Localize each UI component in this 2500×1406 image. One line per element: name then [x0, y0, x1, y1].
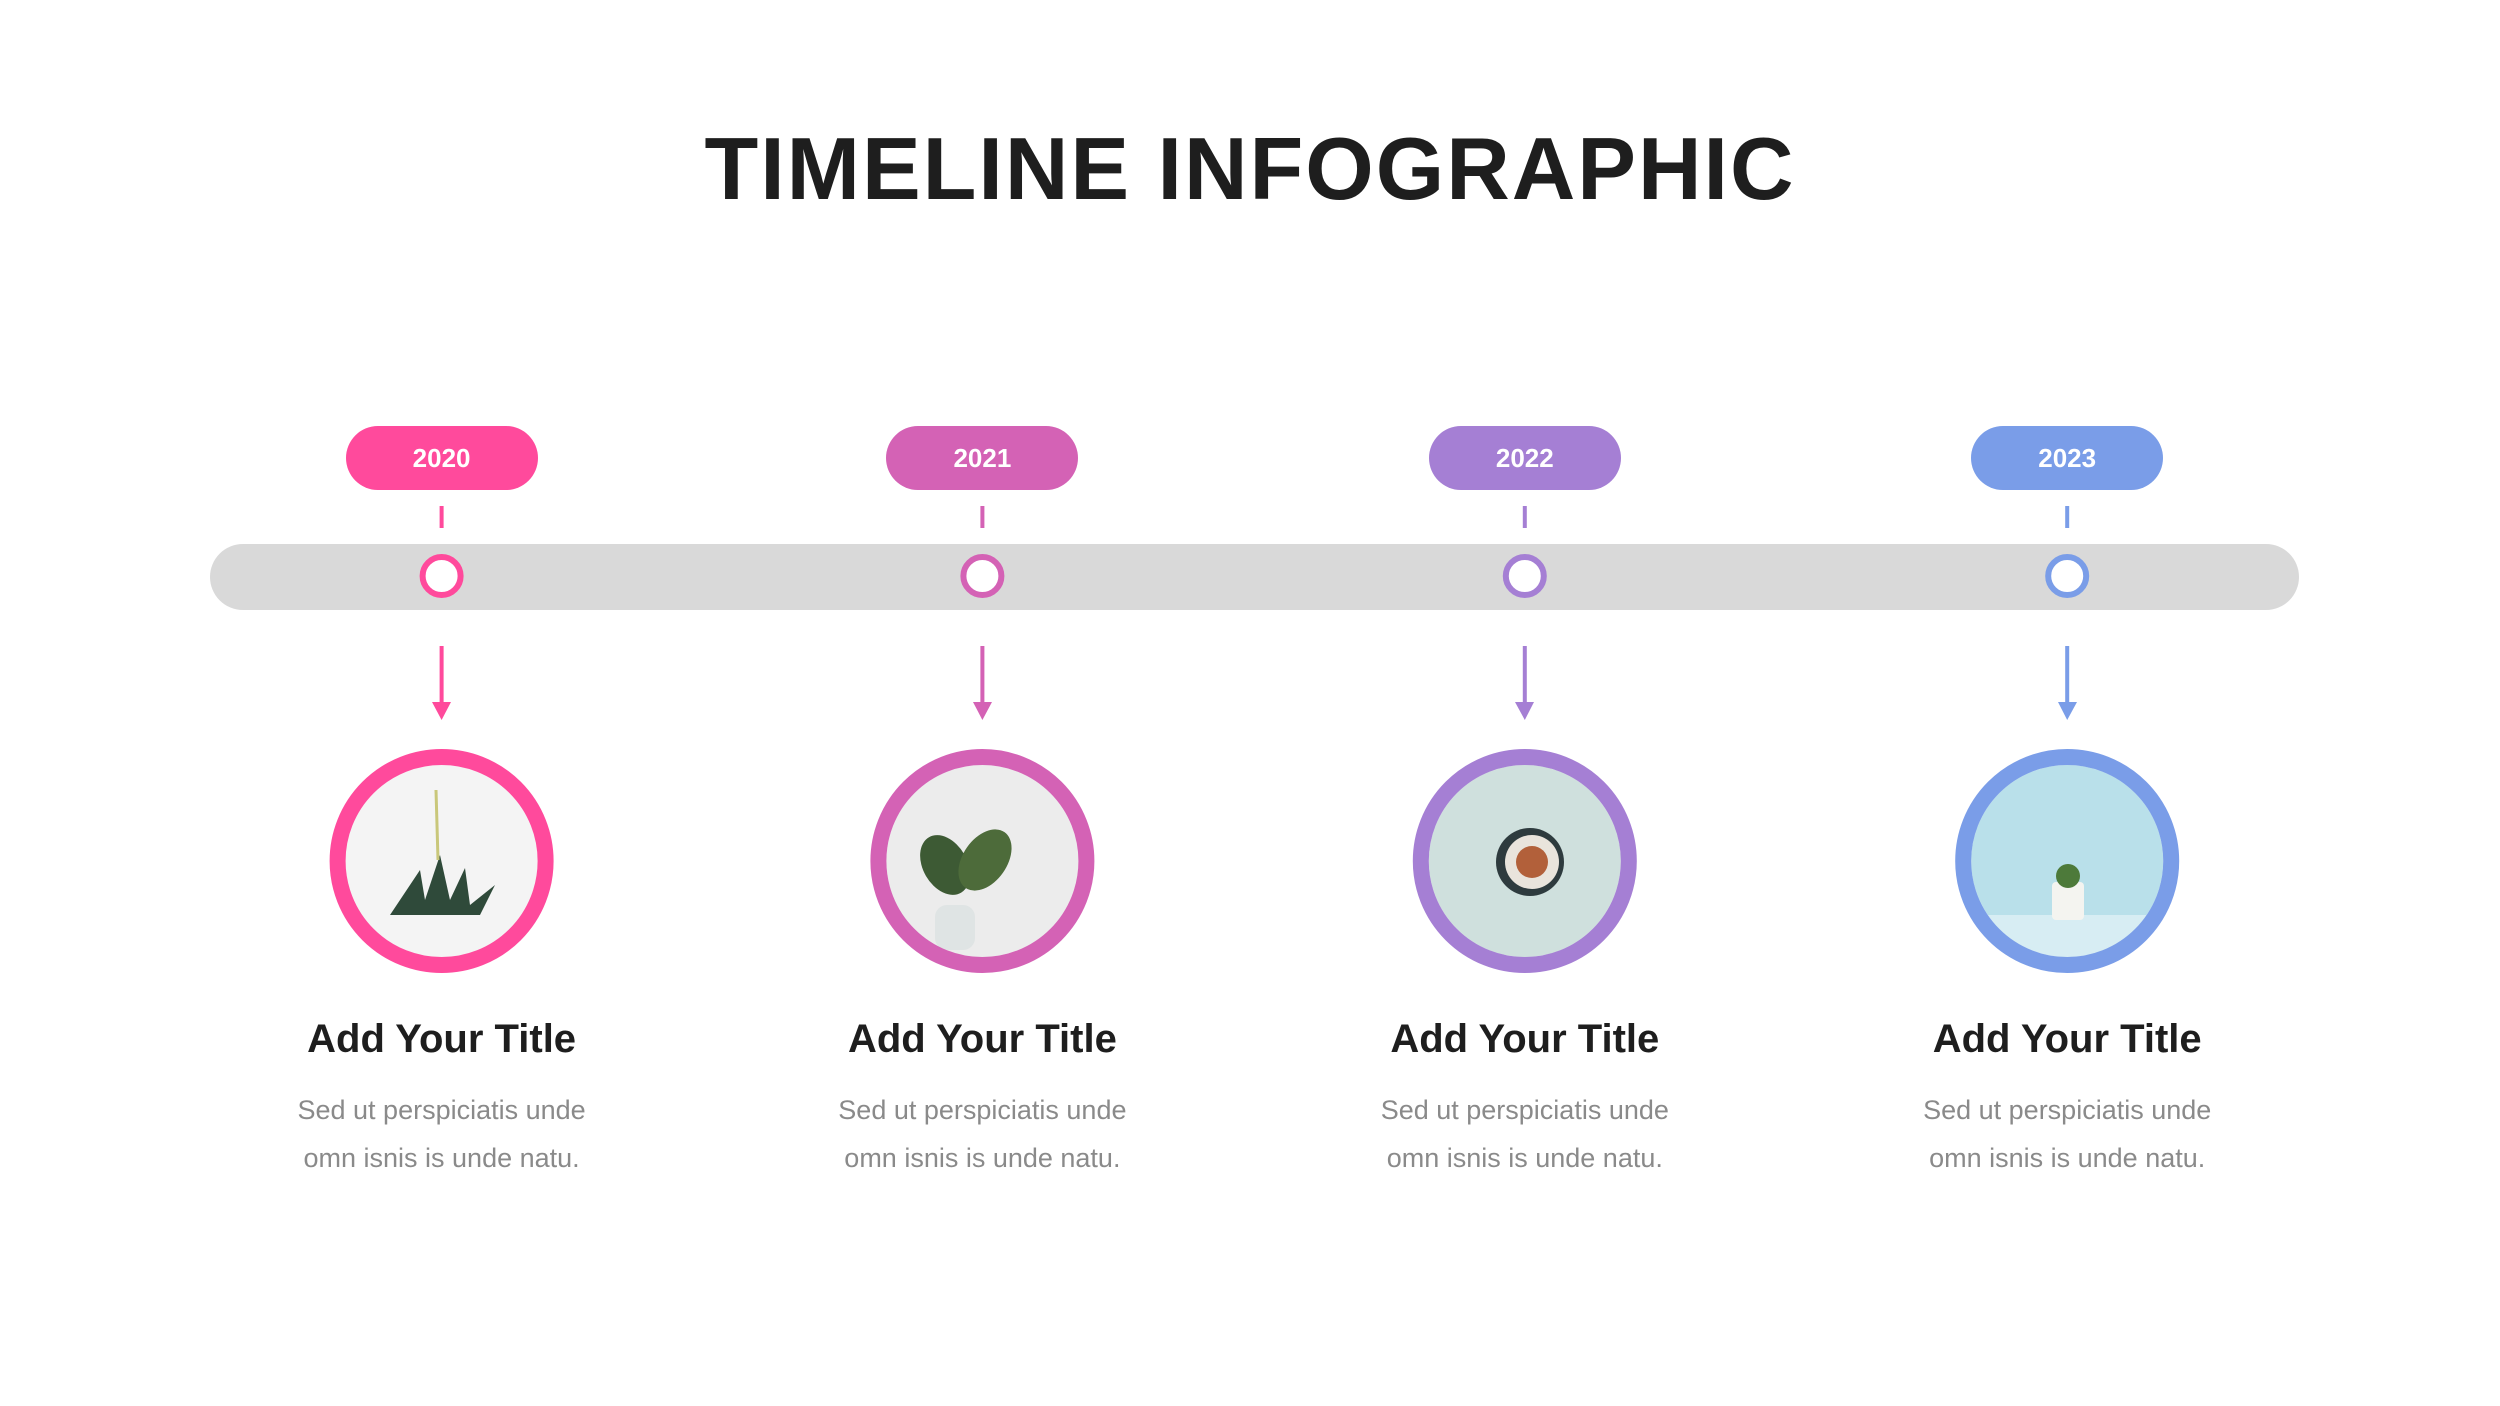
milestone 2022 — [1421, 506, 1629, 965]
heading 3: Add Your Title — [1390, 1017, 1659, 1061]
timeline graphic — [210, 506, 2299, 973]
pill 2021 — [886, 426, 1078, 490]
milestone 2021 — [878, 506, 1086, 965]
text 3: omn isnis is unde natu. — [1387, 1143, 1663, 1173]
title: TIMELINE INFOGRAPHIC — [704, 119, 1796, 218]
pill 2023 — [1971, 426, 2163, 490]
text 4: Sed ut perspiciatis unde — [1923, 1095, 2211, 1125]
pill 2023: 2023 — [2038, 443, 2096, 473]
text 2: Sed ut perspiciatis unde — [838, 1095, 1126, 1125]
milestone 2023 — [1960, 506, 2180, 975]
text 3: Sed ut perspiciatis unde — [1381, 1095, 1669, 1125]
pill 2020: 2020 — [413, 443, 471, 473]
pill 2022 — [1429, 426, 1621, 490]
text 4: omn isnis is unde natu. — [1929, 1143, 2205, 1173]
timeline bar — [210, 544, 2299, 610]
text 2: omn isnis is unde natu. — [844, 1143, 1120, 1173]
milestone 2020 — [338, 506, 546, 965]
text 3 — [1381, 1095, 1669, 1173]
text 2 — [838, 1095, 1126, 1173]
pill 2022: 2022 — [1496, 443, 1554, 473]
text 1: Sed ut perspiciatis unde — [298, 1095, 586, 1125]
heading 4: Add Your Title — [1933, 1017, 2202, 1061]
text 4 — [1923, 1095, 2211, 1173]
text 1: omn isnis is unde natu. — [304, 1143, 580, 1173]
pill 2021: 2021 — [953, 443, 1011, 473]
pill 2020 — [346, 426, 538, 490]
heading 1: Add Your Title — [307, 1017, 576, 1061]
heading 2: Add Your Title — [848, 1017, 1117, 1061]
text 1 — [298, 1095, 586, 1173]
